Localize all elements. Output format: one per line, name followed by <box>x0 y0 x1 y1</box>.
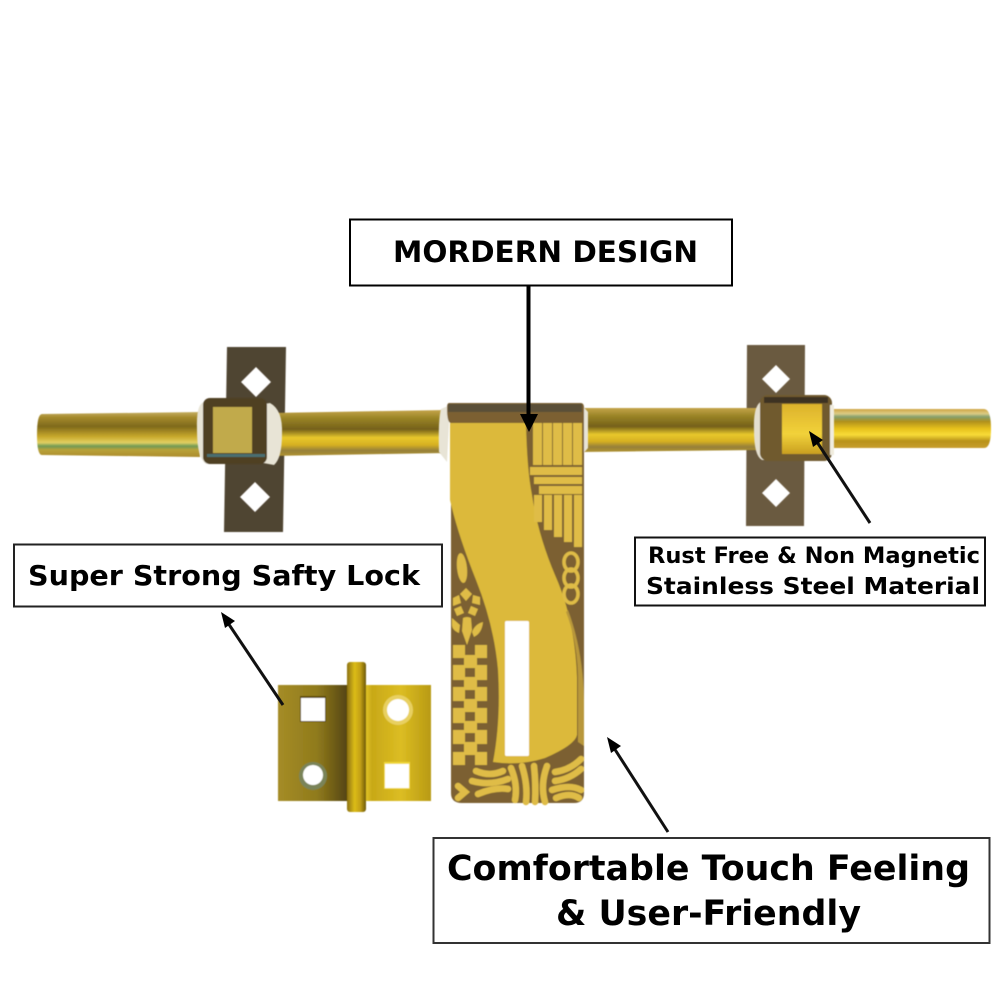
callout: stainless steel box: Rust Free & Non Magnetic <box>648 544 980 569</box>
icon: strike plate latch <box>278 662 431 812</box>
icon: left mounting plate <box>224 347 286 532</box>
hasp dark base <box>447 403 584 803</box>
hasp grid pattern <box>530 423 582 547</box>
latch holes <box>300 696 326 722</box>
callout: safety lock box: Super Strong Safty Lock <box>28 559 421 592</box>
callout: safety lock box <box>14 544 442 606</box>
icon: left rod collar <box>197 398 282 465</box>
hasp gold swoosh panel <box>450 423 577 763</box>
arrow: comfortable touch <box>607 737 668 832</box>
callout: comfortable touch box: Comfortable Touch Feeling <box>447 849 970 889</box>
hasp woven pattern <box>458 759 581 802</box>
hasp flower motif <box>452 553 483 645</box>
callout: stainless steel box: Stainless Steel Material <box>646 574 980 600</box>
icon: right mounting plate <box>746 345 805 526</box>
icon: decorative hasp plate <box>439 403 588 803</box>
callout: comfortable touch box <box>434 838 990 943</box>
icon: right rod collar <box>754 395 834 461</box>
arrow: safety lock <box>221 612 283 705</box>
arrow: stainless steel <box>809 431 870 523</box>
icon: sliding rod <box>37 408 991 457</box>
callout: stainless steel box <box>635 538 985 606</box>
hasp checker pattern <box>453 645 487 765</box>
latch bar <box>347 662 366 812</box>
hasp ring pattern <box>564 553 578 603</box>
arrow: modern design <box>520 286 538 432</box>
callout: comfortable touch box: & User-Friendly <box>556 894 861 934</box>
callout: modern design box: MORDERN DESIGN <box>393 235 698 269</box>
hasp lock slot <box>505 621 529 756</box>
hasp knuckle ends <box>439 405 450 462</box>
callout: modern design box <box>350 220 732 286</box>
